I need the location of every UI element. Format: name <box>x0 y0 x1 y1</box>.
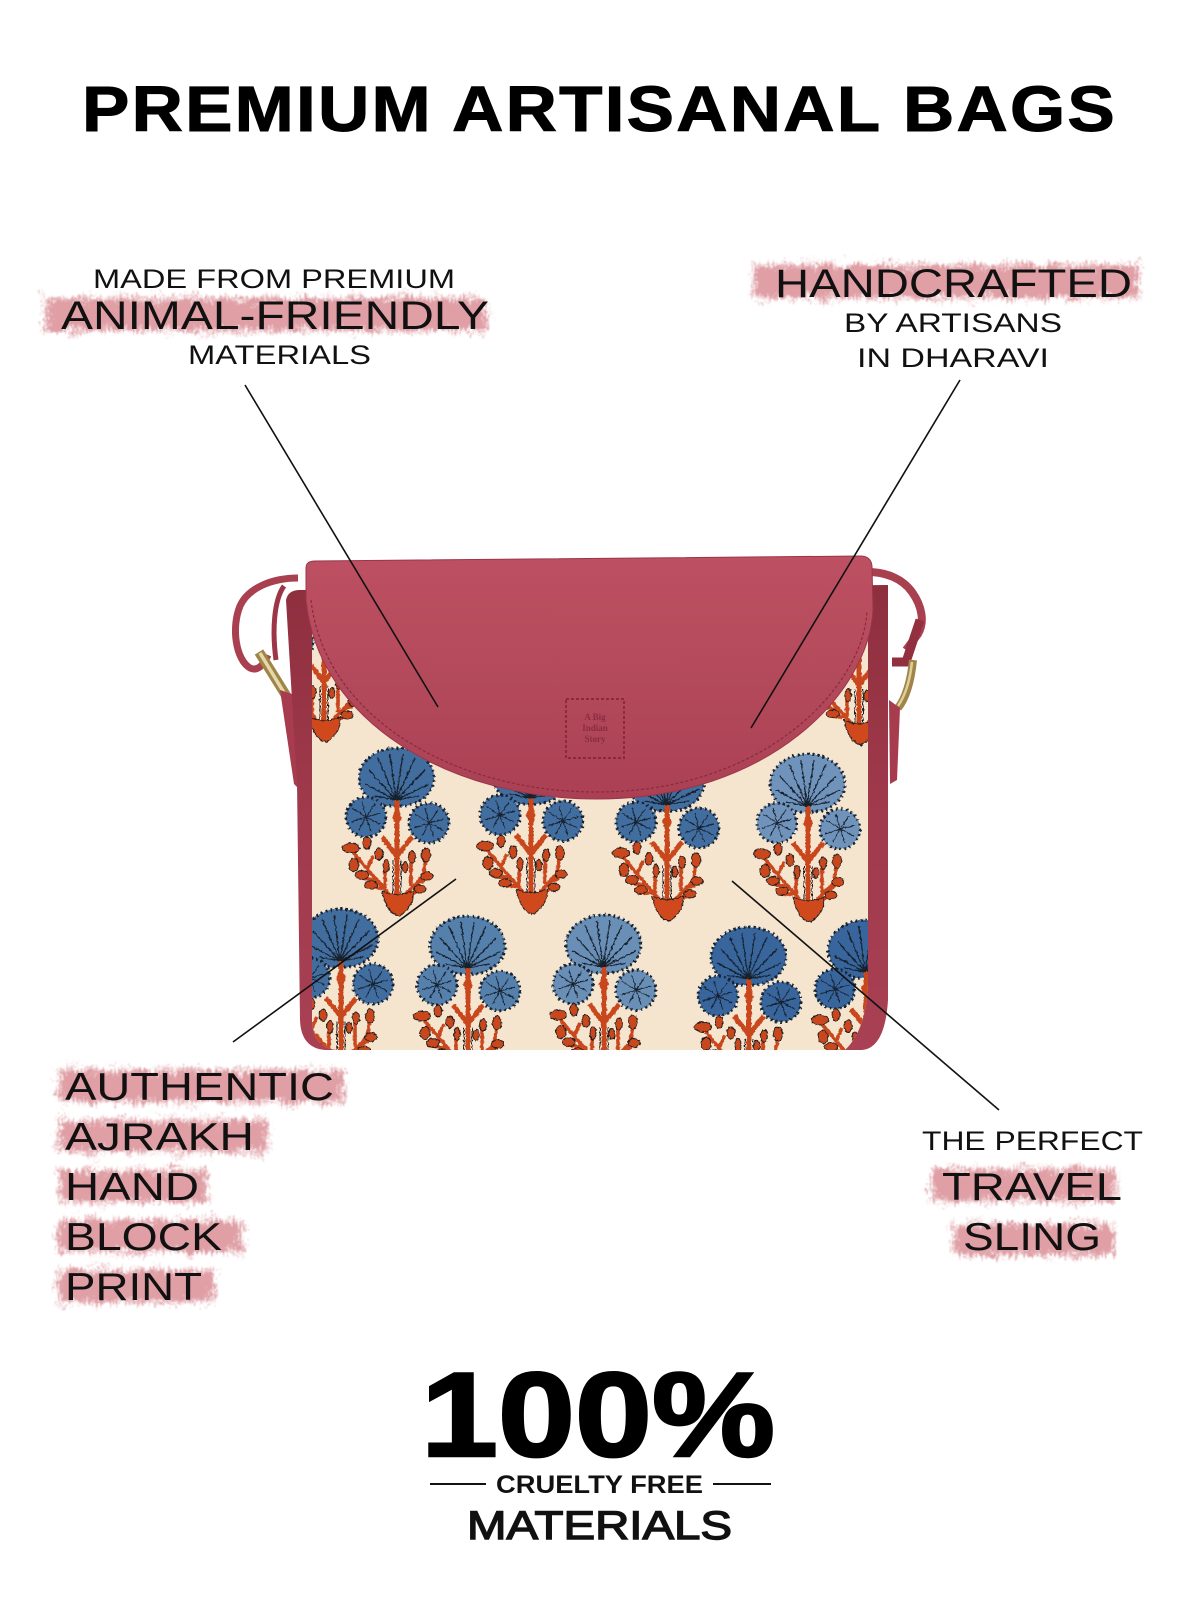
callout: authentic ajrakh hand block print: HAND <box>65 1166 199 1209</box>
arrow: ajrakh print line <box>233 879 456 1042</box>
callout: handcrafted: BY ARTISANS <box>844 308 1062 338</box>
bag logo stamp: Story <box>584 734 606 744</box>
callout: authentic ajrakh hand block print: AUTHENTIC <box>65 1066 334 1109</box>
callout: authentic ajrakh hand block print: PRINT <box>65 1266 202 1309</box>
callout: authentic ajrakh hand block print: AJRAKH <box>65 1116 254 1159</box>
callout: animal-friendly materials <box>46 264 489 370</box>
callout: handcrafted: IN DHARAVI <box>857 343 1049 373</box>
title: PREMIUM ARTISANAL BAGS <box>82 73 1117 145</box>
big percentage: 100% <box>421 1348 775 1482</box>
callout: the perfect travel sling: TRAVEL <box>942 1166 1122 1209</box>
callout: authentic ajrakh hand block print: BLOCK <box>65 1216 222 1259</box>
callout: animal-friendly materials: ANIMAL-FRIENDLY <box>61 294 489 338</box>
badge: 100% cruelty free materials <box>421 1348 775 1548</box>
bag logo stamp: Indian <box>582 723 608 733</box>
printed fabric panel <box>312 634 868 1050</box>
callout: the perfect travel sling <box>922 1126 1143 1259</box>
arrow: travel sling line <box>732 881 999 1110</box>
bag logo stamp: A Big <box>584 712 606 722</box>
arrow: animal-friendly line <box>245 385 438 707</box>
bag strap: right loop <box>868 572 922 784</box>
callout: the perfect travel sling: SLING <box>963 1216 1101 1259</box>
callout: authentic ajrakh hand block print <box>58 1066 343 1309</box>
callout: animal-friendly materials: MATERIALS <box>188 340 371 370</box>
bag body <box>286 585 888 1050</box>
bag strap: left loop <box>235 578 300 790</box>
bag flap <box>306 556 873 799</box>
cruelty free label: CRUELTY FREE <box>496 1471 703 1499</box>
arrow: handcrafted line <box>751 380 960 728</box>
callout: the perfect travel sling: THE PERFECT <box>922 1126 1143 1156</box>
callout: animal-friendly materials: MADE FROM PREMIUM <box>93 264 455 294</box>
callout: handcrafted: HANDCRAFTED <box>775 262 1132 306</box>
materials label: MATERIALS <box>467 1504 732 1548</box>
callout: handcrafted <box>753 262 1138 373</box>
product: bag illustration <box>235 556 922 1095</box>
bag logo stamp <box>566 699 624 758</box>
